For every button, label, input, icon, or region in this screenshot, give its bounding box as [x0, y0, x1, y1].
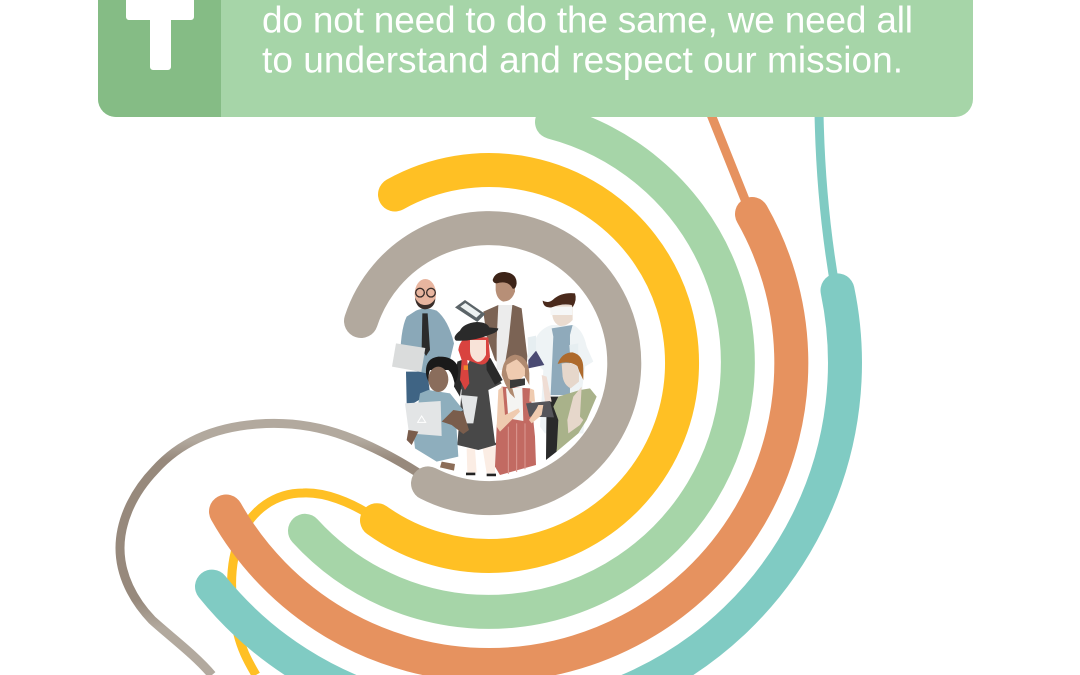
- person: man in brown coat with tablet: [455, 272, 527, 370]
- arc: yellow ring: [377, 170, 682, 556]
- person: seated woman with laptop: [405, 357, 469, 471]
- thin yellow connector line: [232, 493, 372, 675]
- panel: green message banner: [98, 0, 973, 117]
- person: masked man in lab coat: [527, 293, 593, 460]
- arc: green ring: [305, 122, 738, 612]
- person: bald man with glasses and tie: [392, 279, 454, 403]
- illustration: group of diverse people: [392, 272, 597, 476]
- thin teal connector line: [819, 112, 836, 292]
- icon: white T shape: [126, 0, 194, 70]
- banner text: do not need to do the same, we need all: [262, 0, 913, 40]
- arc: teal ring: [212, 290, 845, 675]
- thin gray connector line: [120, 423, 420, 675]
- banner icon column: [98, 0, 221, 117]
- person: ginger man in olive shirt: [542, 352, 597, 452]
- person: woman in red striped dress with tablet: [495, 355, 554, 475]
- person: woman in black hat with red braid: [454, 322, 503, 476]
- banner text: to understand and respect our mission.: [262, 40, 903, 80]
- arc: gray inner ring: [361, 228, 624, 498]
- thin orange connector line: [710, 112, 750, 212]
- arc: orange ring: [226, 214, 791, 665]
